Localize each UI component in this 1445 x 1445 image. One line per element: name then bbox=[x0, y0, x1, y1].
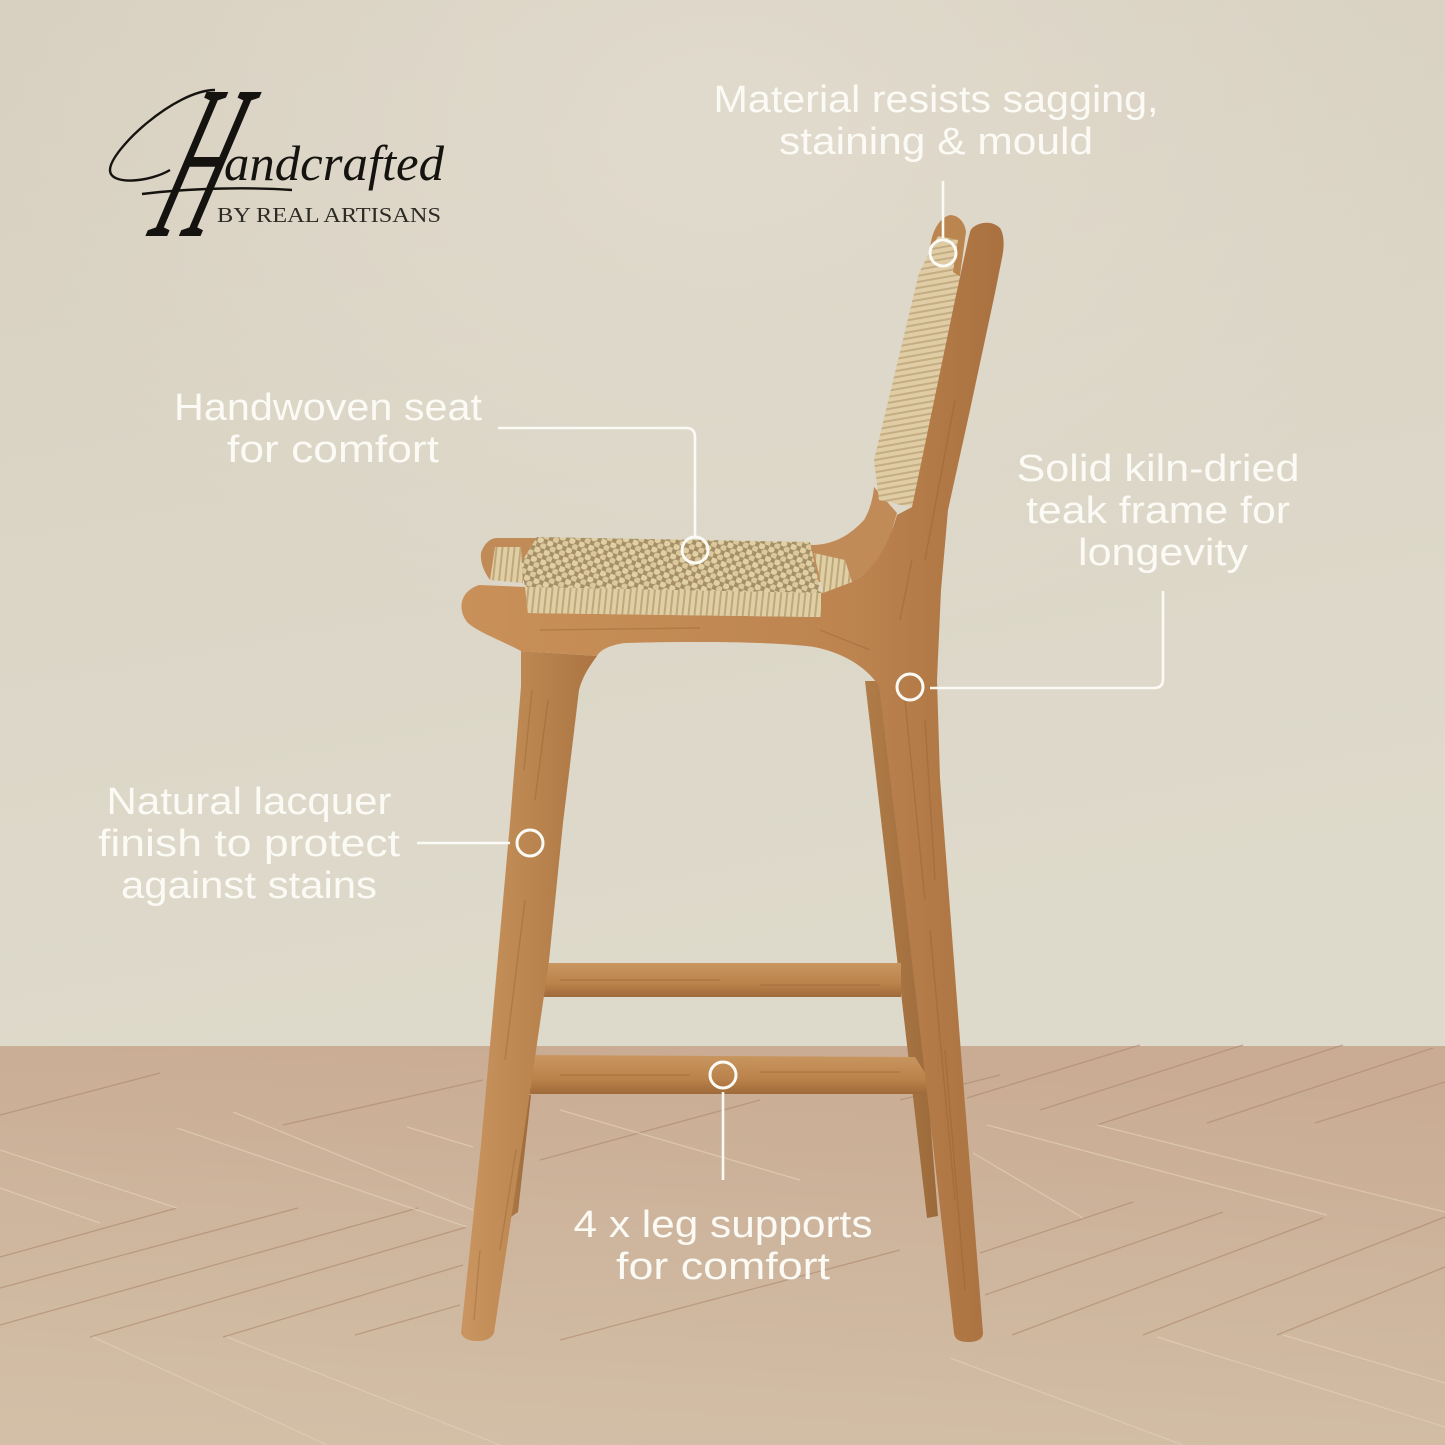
callout: lacquer finish: Natural lacquer bbox=[106, 781, 392, 823]
callout: lacquer finish: finish to protect bbox=[98, 823, 401, 865]
front leg bbox=[461, 651, 597, 1341]
callout: material: staining & mould bbox=[779, 121, 1093, 163]
callout: teak frame: teak frame for bbox=[1026, 490, 1290, 532]
herringbone wood floor bbox=[0, 1045, 1445, 1445]
callout: material: Material resists sagging, bbox=[714, 79, 1158, 121]
logo flourish bbox=[110, 90, 292, 194]
logo script word: andcrafted bbox=[224, 135, 445, 191]
right side seat weave bbox=[814, 553, 852, 593]
callout: material bbox=[714, 79, 1158, 266]
callout: handwoven seat: Handwoven seat bbox=[174, 387, 482, 429]
far back leg bbox=[865, 681, 938, 1218]
callout: teak frame bbox=[897, 448, 1300, 700]
callout: teak frame: Solid kiln-dried bbox=[1016, 448, 1300, 490]
upper footrest bbox=[540, 963, 901, 997]
callout: handwoven seat: for comfort bbox=[227, 429, 439, 471]
far top post bbox=[919, 215, 966, 290]
callout: handwoven seat bbox=[174, 387, 708, 563]
callout: lacquer finish: against stains bbox=[121, 865, 377, 907]
far front leg bbox=[505, 1095, 531, 1217]
seat weave top bbox=[521, 537, 821, 593]
back weave panel bbox=[874, 236, 977, 508]
wood grain detail bbox=[474, 400, 965, 1320]
bar stool bbox=[461, 215, 1004, 1342]
callout: leg supports bbox=[574, 1062, 872, 1288]
left side seat weave bbox=[490, 547, 523, 583]
background wall bbox=[0, 0, 1445, 1046]
callout: leg supports: for comfort bbox=[616, 1246, 831, 1288]
logo script capital: H bbox=[123, 40, 286, 284]
far seat rail bbox=[481, 487, 897, 582]
callout: teak frame: longevity bbox=[1078, 532, 1248, 574]
logo: Handcrafted by real artisans bbox=[110, 40, 445, 284]
seat frame, rear upright and main back leg bbox=[462, 223, 1004, 1342]
seat front edge weave bbox=[525, 587, 821, 617]
callout: leg supports: 4 x leg supports bbox=[574, 1204, 872, 1246]
callout: lacquer finish bbox=[98, 781, 543, 907]
lower footrest bbox=[525, 1055, 927, 1094]
logo subtitle: BY REAL ARTISANS bbox=[217, 203, 441, 227]
